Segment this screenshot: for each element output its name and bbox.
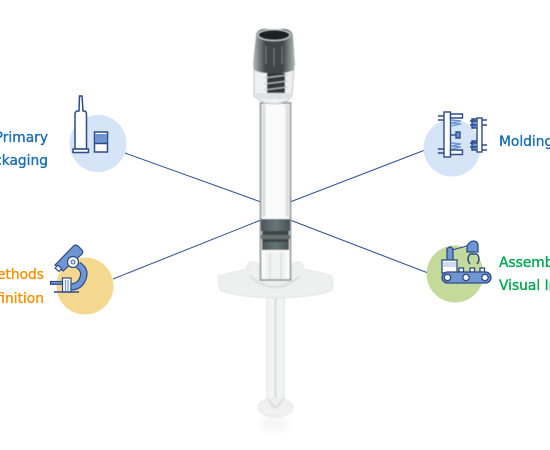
icon: syringe and vial xyxy=(73,96,108,152)
stopper xyxy=(261,219,290,250)
item: primary packaging xyxy=(0,96,126,172)
item: assembly and visual inspection xyxy=(426,241,550,302)
circle: assembly xyxy=(426,246,484,302)
plunger disk xyxy=(258,398,293,417)
connector lines xyxy=(113,150,428,279)
barrel xyxy=(260,103,290,280)
circle: molding xyxy=(424,120,480,176)
luer collar xyxy=(254,66,294,104)
circle: methods definition xyxy=(56,258,114,314)
syringe xyxy=(218,29,333,432)
circle: primary packaging xyxy=(70,115,126,172)
item: methods definition xyxy=(0,245,114,314)
needle cap xyxy=(253,29,295,73)
icon: robotic arm on conveyor xyxy=(442,241,491,283)
finger flange xyxy=(218,262,333,298)
icon: mold tool xyxy=(438,112,487,157)
icon: microscope xyxy=(50,245,84,292)
item: molding xyxy=(424,112,550,176)
plunger shadow xyxy=(260,416,290,432)
plunger rod xyxy=(267,296,284,402)
